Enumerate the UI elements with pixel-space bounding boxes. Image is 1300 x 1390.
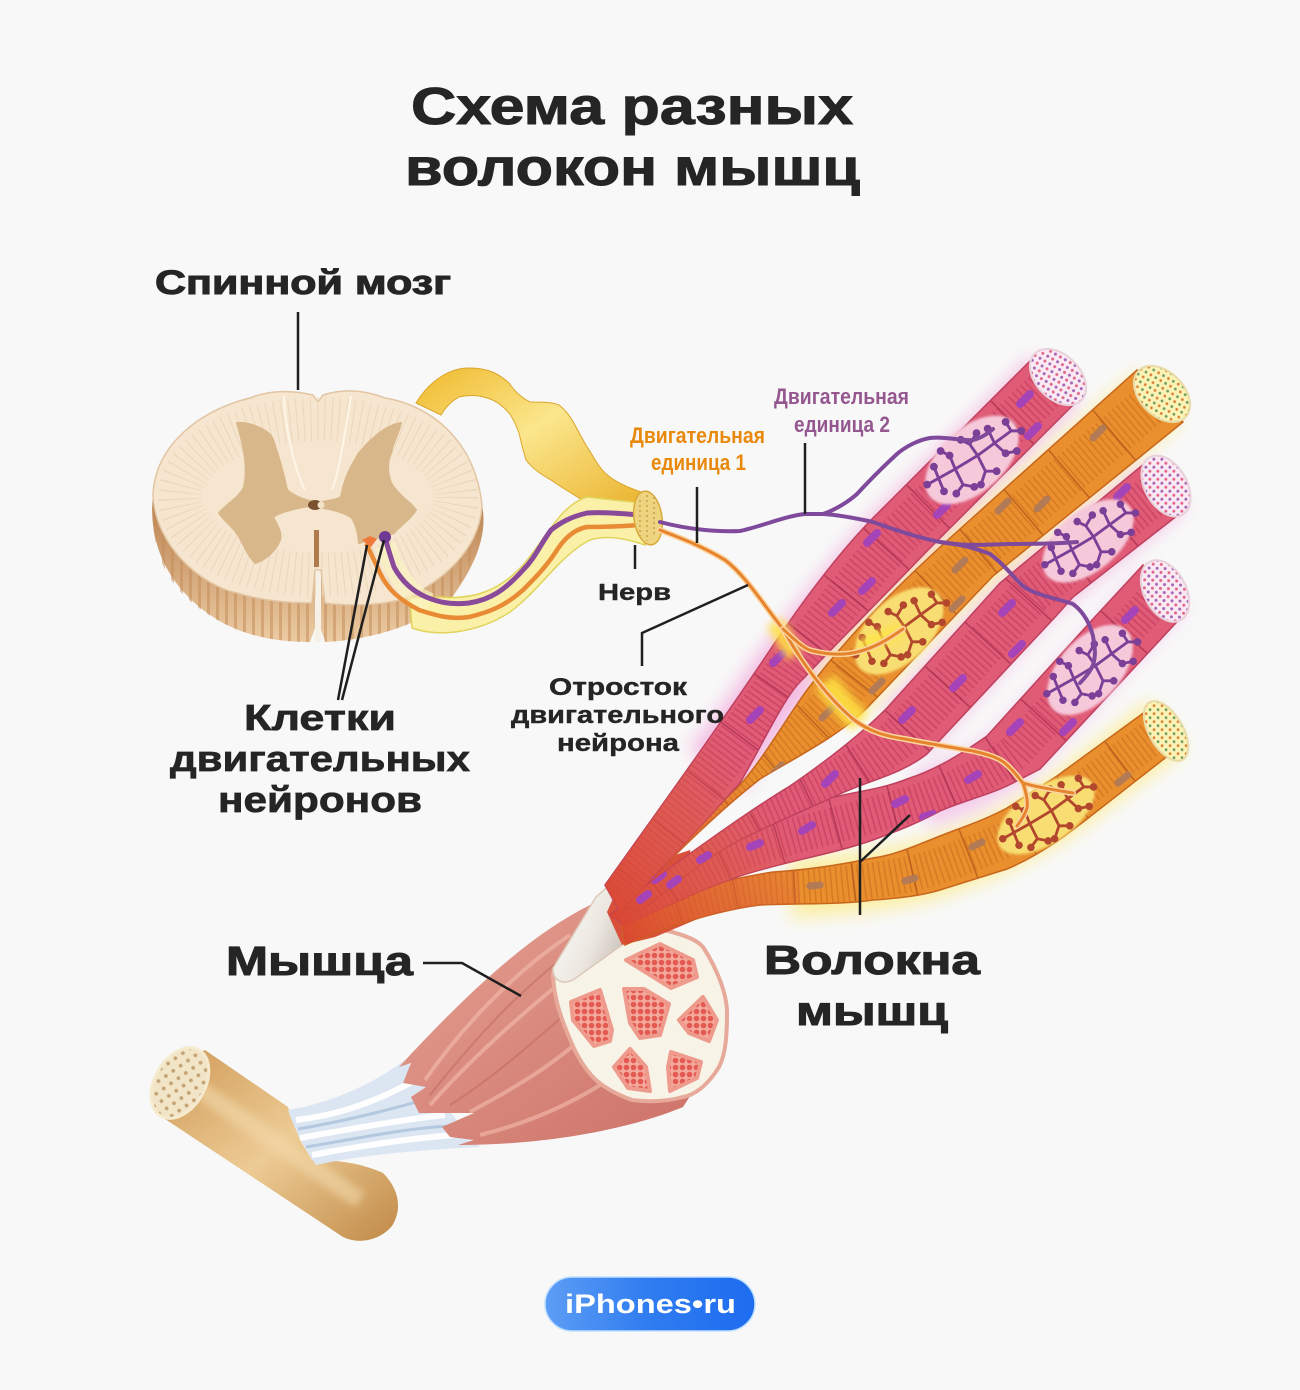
end plate: unit 1 on fibre 5	[984, 760, 1108, 870]
fibre nuclei	[640, 394, 1135, 900]
muscle cross-section	[553, 913, 727, 1101]
bone cut end	[139, 1038, 221, 1128]
muscle fibre 1 (pink)	[605, 338, 1097, 912]
label: axon of motor neuron: нейрона	[557, 730, 680, 757]
motor unit 2 axon (purple)	[660, 429, 1095, 683]
label: muscle fibres	[764, 937, 981, 1034]
bundles	[571, 944, 717, 1091]
label: motor unit 2: Двигательная	[774, 384, 909, 409]
label: motor neuron cells	[170, 697, 470, 820]
muscle fibre 3 (pink)	[642, 454, 1192, 894]
label: motor neuron cells: Клетки	[244, 697, 396, 738]
label: nerve: Нерв	[598, 579, 671, 605]
label: motor neuron cells: двигательных	[170, 738, 470, 779]
motor end plates	[839, 399, 1149, 870]
fibres glow	[715, 380, 1168, 888]
label: motor neuron cells: нейронов	[218, 779, 422, 820]
muscle fibre 4 (pink)	[610, 552, 1199, 925]
leader: motor unit 2	[804, 443, 806, 514]
motor unit 1 axon (orange)	[660, 530, 1073, 826]
leader: muscle fibres	[860, 778, 910, 915]
label: axon of motor neuron	[511, 674, 724, 757]
leader: motor neuron cells	[338, 540, 384, 700]
muscle fibre 2 (orange)	[661, 364, 1192, 870]
label: motor unit 1: Двигательная	[630, 423, 765, 448]
leader: spinal cord	[297, 312, 299, 390]
label: muscle fibres: Волокна	[764, 937, 981, 983]
tendon	[288, 1060, 480, 1165]
title	[405, 78, 860, 197]
nerve cut end	[630, 489, 666, 547]
nerve root and ganglion	[385, 368, 650, 633]
neuron cell bodies	[362, 531, 391, 547]
label: spinal cord: Спинной мозг	[155, 264, 451, 302]
ventral root	[410, 497, 645, 633]
cord top surface	[153, 391, 482, 605]
title: волокон мышц	[405, 139, 860, 197]
title: Схема разных	[411, 78, 853, 136]
logo: iPhones.ru: iPhones•ru	[565, 1289, 736, 1319]
logo: iPhones.ru	[545, 1277, 755, 1331]
end plate: unit 2 on fibre 1	[909, 399, 1035, 521]
yellow nerve highlight	[775, 622, 903, 722]
muscle belly	[399, 905, 727, 1145]
leader: muscle	[423, 963, 521, 996]
muscle fibre 5 (orange)	[620, 694, 1197, 945]
spinal cord cross-section	[152, 391, 483, 642]
root tint	[605, 747, 800, 945]
end plate: unit 1 on fibre 2	[839, 571, 959, 691]
bundle root base	[607, 850, 700, 945]
leader: nerve	[634, 545, 636, 569]
label: motor unit 2: единица 2	[794, 412, 890, 437]
leader: axon	[642, 585, 748, 666]
label: motor unit 2	[774, 384, 909, 437]
bone	[139, 1038, 398, 1241]
label: muscle: Мышца	[226, 938, 414, 984]
cord side wall	[152, 495, 483, 642]
end plate: unit 2 on fibre 4	[1031, 609, 1149, 731]
end plate: unit 2 on fibre 3	[1027, 483, 1149, 599]
grey matter	[219, 423, 416, 563]
label: axon of motor neuron: двигательного	[511, 702, 724, 729]
motor neuron axons in cord	[362, 513, 640, 618]
label: muscle fibres: мышц	[796, 988, 948, 1034]
label: motor unit 1: единица 1	[651, 450, 746, 475]
label: motor unit 1	[630, 423, 765, 475]
leader: motor unit 1	[696, 487, 698, 543]
label: axon of motor neuron: Отросток	[549, 674, 688, 701]
central canal	[308, 500, 322, 510]
fibre bundle sheath	[553, 880, 640, 982]
